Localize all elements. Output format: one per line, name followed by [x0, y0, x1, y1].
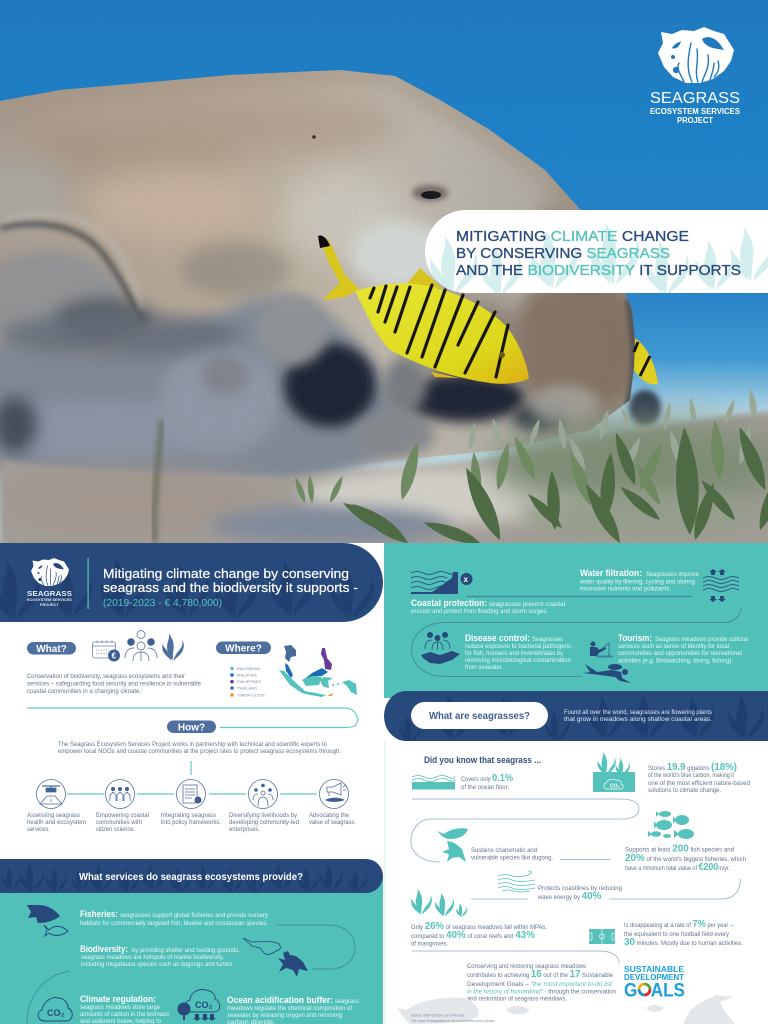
source note	[411, 1014, 495, 1023]
legend: countries: TIMOR-LESTE	[237, 693, 266, 697]
section: How?: How?	[178, 722, 205, 734]
service: biodiversity: including megafauna species such as dugongs and turtles.	[81, 961, 234, 968]
heading banner: What are seagrasses?: Found all over the world, seagrasses are flowering plants	[564, 709, 712, 716]
service: climate regulation	[38, 994, 169, 1024]
source note: Source: UNEP (2020). Out of the blue:	[411, 1014, 465, 1018]
logo: Sustainable Development Goals: DEVELOPMENT	[624, 973, 684, 982]
fact: marine protected areas: of mangroves.	[411, 940, 448, 948]
dugong body	[0, 70, 637, 470]
service: coastal protection: Coastal protection:	[411, 598, 487, 609]
title banner: AND THE BIODIVERSITY IT SUPPORTS	[456, 263, 741, 279]
icon: cloud, tree, arrows: CO₂	[195, 1000, 212, 1010]
icon: football field	[589, 929, 615, 944]
icon: filtered water	[703, 569, 739, 602]
logo small: ECOSYSTEM SERVICES	[27, 598, 73, 602]
fact: disappearing rate	[589, 918, 743, 948]
heading banner: What are seagrasses?: What are seagrasses?	[429, 710, 530, 722]
icon: angler	[590, 642, 612, 657]
text block: SDG contribution: in the history of humankind" - through the conservation	[467, 988, 616, 996]
service: disease control: from seawater.	[465, 664, 503, 671]
connector: teal line to How	[27, 708, 358, 728]
fish: small golden trevally	[634, 338, 658, 384]
icon: CO2 cloud: CO₂	[47, 1008, 64, 1018]
service: water filtration	[579, 568, 739, 602]
captions: five actions: into policy frameworks.	[161, 819, 221, 826]
icon: community livelihoods	[248, 780, 278, 808]
header banner: project summary	[0, 543, 383, 622]
sand seabed	[0, 410, 768, 560]
icon: megaphone on wave	[320, 780, 348, 808]
icon: people over hand	[421, 632, 460, 664]
icon: citizen scientists	[106, 780, 134, 808]
fact: charismatic species: Sustains charismatic and	[471, 847, 537, 854]
fact: marine protected areas: compared to 40% of coral reefs and 43%	[411, 929, 536, 941]
fish: golden trevally	[318, 235, 529, 384]
icon: calendar with euro: €	[112, 652, 116, 660]
service: biodiversity: Biodiversity:	[80, 944, 128, 955]
S-curve connector	[411, 799, 740, 899]
icon: drone	[36, 780, 66, 808]
service: disease control: for fish, humans and invertebrates by	[465, 650, 564, 657]
logo small: SEAGRASS	[27, 589, 72, 598]
service: ocean acidification buffer: meadows regulate the chemical composition of	[227, 1005, 352, 1012]
hero photo: dugong feeding in seagrass	[0, 0, 768, 560]
logo: Seagrass Ecosystem Services Project: ECOSYSTEM SERVICES	[650, 107, 741, 116]
fact: wave energy: wave energy by 40%.	[537, 890, 603, 902]
captions: five actions: Empowering coastal	[96, 812, 149, 819]
fact: disappearing rate: the equivalent to one football field every	[624, 931, 730, 938]
icon: seagrass CO2 sediment: CO₂	[610, 784, 620, 790]
icon: seagrass CO2 sediment	[593, 752, 635, 792]
legend: countries	[230, 667, 266, 697]
service: coastal protection: seagrasses prevent coastal	[489, 601, 565, 608]
captions: five actions: health and ecosystem	[27, 819, 86, 826]
icon: waves	[412, 776, 455, 790]
service: tourism: activities (e.g. Birdwatching, diving, fishing).	[618, 658, 733, 664]
text block: what	[27, 673, 201, 695]
icon: SDG wheel	[639, 984, 650, 995]
fact: fisheries value	[625, 811, 746, 873]
fact: blue carbon: one of the most efficient nature-based	[648, 780, 750, 787]
service: ocean acidification buffer	[178, 990, 359, 1024]
watermark: marine animals	[397, 995, 735, 1024]
sediment cloud	[0, 294, 661, 485]
captions: five actions: value of seagrass.	[309, 819, 356, 826]
section: How?	[167, 720, 216, 734]
source note: The value of seagrasses to the environment and to people	[411, 1019, 495, 1023]
text block: SDG contribution: Development Goals – "the most important to-do list	[467, 981, 612, 988]
service: tourism	[583, 633, 748, 683]
section: Where?: Where?	[225, 643, 262, 654]
fact: marine protected areas: Only 26% of seagrass meadows fall within MPAs,	[411, 920, 547, 932]
text block: what: Conservation of biodiversity, seagrass ecosystems and their	[27, 673, 186, 680]
legend: countries: PHILIPPINES	[237, 680, 261, 684]
icon: dugong and turtle	[437, 828, 468, 862]
section: What?	[27, 630, 201, 695]
panel: right lower background	[384, 741, 386, 1024]
legend: countries: THAILAND	[237, 686, 257, 690]
service: disease control: reduce exposure to bacterial pathogens	[465, 643, 571, 650]
service: ocean acidification buffer: Ocean acidification buffer:	[227, 995, 333, 1006]
text block: what: services – safeguarding food security and resilience in vulnerable	[27, 680, 201, 688]
service: tourism: Tourism:	[618, 633, 652, 644]
icon: seagrass	[162, 633, 184, 661]
heading banner: What are seagrasses?	[384, 691, 768, 743]
fact: ocean floor: of the ocean floor.	[461, 784, 509, 791]
section: What?: What?	[36, 644, 67, 655]
icon: community group	[125, 630, 157, 661]
fact: charismatic species	[437, 828, 553, 862]
captions: five actions: citizen science.	[96, 826, 135, 833]
logo: Sustainable Development Goals: GOALS	[624, 980, 685, 1002]
text block: how: The Seagrass Ecosystem Services Project works in partnership with technical and scientific experts to	[58, 741, 327, 748]
fact: fisheries value: have a minimum total value of €200m/yr.	[625, 861, 730, 873]
service: fisheries: habitats for commercially targeted fish, bivalve and crustacean species.	[80, 920, 268, 927]
heading banner: services: What services do seagrass ecosystems provide?	[79, 871, 303, 883]
logo small: PROJECT	[40, 603, 60, 607]
title banner: MITIGATING CLIMATE CHANGE	[456, 229, 689, 245]
icon: cloud, tree, arrows	[178, 990, 220, 1021]
legend: countries: MALAYSIA	[237, 673, 257, 677]
service: tourism: communities and opportunities for recreational	[618, 650, 742, 657]
logo: Seagrass Ecosystem Services Project	[650, 27, 741, 125]
service: disease control	[421, 632, 571, 671]
logo: Seagrass Ecosystem Services Project: PROJECT	[677, 116, 713, 125]
icon: policy document	[176, 780, 206, 808]
captions: five actions	[27, 812, 356, 833]
icon: calendar with euro	[92, 640, 120, 662]
panel: left column background	[0, 543, 384, 1024]
service: ocean acidification buffer: seawater by releasing oxygen and removing	[227, 1012, 342, 1019]
service: coastal protection	[411, 572, 565, 615]
fact: fisheries value: Supports at least 200 fish species and	[625, 842, 734, 854]
panel: services teal (left)	[0, 876, 383, 1024]
title banner	[425, 210, 768, 295]
service: disease control: removing microbiological contamination	[465, 657, 571, 664]
icon: waves	[498, 871, 535, 892]
fact: marine protected areas	[411, 888, 547, 948]
service: coastal protection: erosion and protect from flooding and storm surges.	[411, 608, 548, 615]
service: climate regulation: seagrass meadows store large	[80, 1004, 160, 1011]
icon: dugong outline	[243, 938, 280, 954]
fact: blue carbon: solutions to climate change.	[648, 787, 721, 794]
service: biodiversity	[80, 938, 308, 977]
captions: five actions: Integrating seagrass	[161, 812, 216, 819]
service: water filtration: excessive nutrients and pollutants.	[580, 586, 671, 592]
panel: services teal (right)	[384, 543, 768, 698]
service: disease control: Seagrasses	[532, 636, 563, 643]
fact: ocean floor: Covers only 0.1%	[461, 772, 514, 784]
fact: charismatic species: vulnerable species like dugong.	[471, 854, 553, 862]
icon: waves on shore	[411, 572, 472, 594]
fact: blue carbon: Stores 19.9 gigatons (18%)	[648, 761, 737, 773]
heading banner: services	[0, 859, 383, 893]
header banner: project summary: seagrass and the biodiversity it supports -	[103, 580, 358, 595]
text block: SDG contribution: and restoration of seagrass meadows.	[467, 996, 567, 1002]
legend: countries: INDONESIA	[237, 667, 261, 671]
logo: Sustainable Development Goals	[624, 965, 685, 1002]
text block: what: coastal communities in a changing climate.	[27, 688, 141, 695]
text block: SDG contribution	[467, 963, 616, 1002]
fact: disappearing rate: Is disappearing at a rate of 7% per year –	[624, 918, 733, 930]
captions: five actions: Assessing seagrass	[27, 812, 80, 819]
icon: seagrass	[411, 888, 467, 917]
fact: ocean floor	[412, 772, 514, 791]
service: tourism: Seagrass meadows provide cultural	[655, 636, 748, 643]
heading banner: What are seagrasses?: that grow in meadows along shallow coastal areas.	[564, 716, 712, 723]
title banner: BY CONSERVING SEAGRASS	[456, 246, 670, 262]
map: Southeast Asia	[279, 645, 357, 697]
icon: turtle	[278, 951, 308, 977]
service: climate regulation: amounts of carbon in the biomass	[80, 1011, 169, 1018]
fact: blue carbon: of the world's blue carbon, making it	[648, 772, 734, 779]
service connectors right	[412, 596, 741, 676]
captions: five actions: developing community-led	[229, 819, 299, 826]
service: water filtration: water quality by filtering, cycling and storing	[579, 578, 695, 586]
fact: fisheries value: 20% of the world's biggest fisheries, which	[625, 852, 746, 864]
fact: disappearing rate: 30 minutes. Mostly due to human activities.	[624, 936, 743, 948]
logo small	[27, 558, 73, 607]
logo: Sustainable Development Goals: SUSTAINABLE	[624, 965, 685, 974]
fact: wave energy	[498, 871, 622, 902]
service: water filtration: Seagrasses improve	[646, 571, 699, 578]
service: fisheries: seagrasses support global fisheries and provide nursery	[120, 912, 269, 919]
header banner: project summary: (2019-2023 - € 4,780,000)	[103, 597, 222, 609]
fact: wave energy: Protects coastlines by reducing	[538, 885, 622, 892]
captions: five actions: enterprises.	[229, 826, 260, 833]
service: climate regulation: Climate regulation:	[80, 994, 156, 1005]
service: disease control: Disease control:	[465, 633, 530, 644]
text block: SDG contribution: Conserving and restoring seagrass meadows	[467, 963, 586, 970]
header banner: project summary: Mitigating climate change by conserving	[103, 566, 349, 581]
service: fisheries	[27, 905, 269, 936]
service: fisheries: Fisheries:	[80, 909, 118, 920]
service connectors	[27, 925, 355, 1024]
service: water filtration: Water filtration:	[580, 568, 642, 579]
service: biodiversity: by providing shelter and feeding grounds,	[132, 947, 240, 954]
service: biodiversity: seagrass meadows are hotspots of marine biodiversity,	[81, 954, 224, 961]
logo: Seagrass Ecosystem Services Project: SEAGRASS	[650, 90, 740, 107]
icon: diver	[583, 664, 631, 683]
seagrass blades	[154, 388, 768, 549]
icon: waves on shore: x	[464, 575, 468, 584]
captions: five actions: communities with	[96, 819, 142, 826]
text block: how	[58, 741, 341, 755]
service: ocean acidification buffer: seagrass	[335, 998, 359, 1005]
captions: five actions: Advocating the	[309, 812, 349, 819]
service: tourism: services such as sense of identity for local	[618, 643, 729, 650]
text block: how: empower local NGOs and coastal communities at the project sites to protect seagrass ecosystems through:	[58, 748, 341, 755]
icon: fish school	[648, 811, 694, 839]
text block: SDG contribution: contributes to achieving 16 out of the 17 Sustainable	[467, 968, 613, 980]
section: Where?	[216, 642, 357, 697]
heading: Did you know: Did you know that seagrass ...	[424, 755, 541, 765]
fact: blue carbon	[593, 752, 750, 794]
process: five actions	[36, 780, 348, 808]
captions: five actions: Diversifying livelihoods by	[229, 812, 298, 819]
icon: fish	[27, 905, 68, 936]
captions: five actions: services.	[27, 826, 50, 833]
